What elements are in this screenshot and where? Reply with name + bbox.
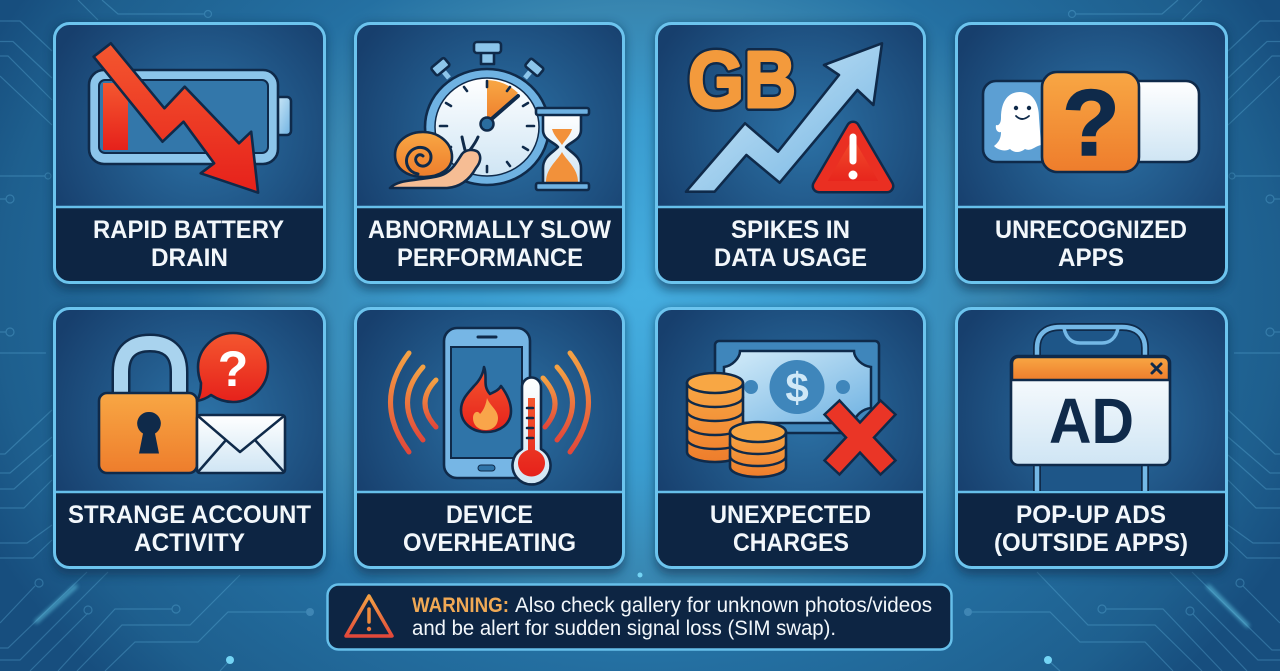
label: pop-up ads outside apps xyxy=(994,501,1188,557)
label: abnormally slow performance: ABNORMALLY SLOW xyxy=(368,216,611,244)
label: device overheating xyxy=(403,501,576,557)
icon: GB with rising arrow and alert xyxy=(686,35,887,192)
icon: GB with rising arrow and alert: GB xyxy=(688,35,796,124)
icon: padlock, question bubble and envelope: ? xyxy=(218,341,248,397)
panel: device overheating xyxy=(354,308,625,575)
label: spikes in data usage xyxy=(714,216,867,272)
panel: abnormally slow performance xyxy=(354,24,625,290)
icon: GB with rising arrow and alert: GB xyxy=(688,35,796,124)
label: unexpected charges: UNEXPECTED xyxy=(710,501,871,529)
label: unrecognized apps xyxy=(995,216,1187,272)
panel: unexpected charges xyxy=(655,308,926,575)
icon: warning triangle xyxy=(346,596,392,636)
warning text: WARNING: xyxy=(412,594,509,617)
label: strange account activity xyxy=(68,501,311,557)
label: device overheating: DEVICE xyxy=(446,501,533,529)
callout: warning xyxy=(328,584,952,650)
label: unrecognized apps: APPS xyxy=(1058,244,1124,272)
label: pop-up ads outside apps: POP-UP ADS xyxy=(1016,501,1166,529)
panel: strange account activity xyxy=(53,308,326,575)
icon: draining battery with red arrow xyxy=(89,43,291,193)
label: rapid battery drain xyxy=(93,216,284,272)
label: strange account activity: ACTIVITY xyxy=(134,529,245,557)
panel: spikes in data usage xyxy=(655,24,926,290)
panel: rapid battery drain xyxy=(53,24,326,290)
icon: banknote, coins and red cross xyxy=(687,341,881,477)
label: spikes in data usage: SPIKES IN xyxy=(731,216,850,244)
icon: stopwatch, snail and hourglass xyxy=(390,42,589,190)
icon: padlock, question bubble and envelope xyxy=(99,333,285,473)
label: unrecognized apps: UNRECOGNIZED xyxy=(995,216,1187,244)
label: unexpected charges: CHARGES xyxy=(733,529,849,557)
label: pop-up ads outside apps: (OUTSIDE APPS) xyxy=(994,529,1188,557)
icon: app tiles with question mark xyxy=(983,70,1199,175)
label: device overheating: OVERHEATING xyxy=(403,529,576,557)
warning text: and be alert for sudden signal loss (SIM swap). xyxy=(412,617,836,640)
label: abnormally slow performance: PERFORMANCE xyxy=(397,244,583,272)
label: rapid battery drain: DRAIN xyxy=(151,244,228,272)
panel: pop-up ads outside apps xyxy=(955,308,1228,575)
label: strange account activity: STRANGE ACCOUNT xyxy=(68,501,311,529)
label: abnormally slow performance xyxy=(368,216,611,272)
warning text: Also check gallery for unknown photos/videos xyxy=(515,594,932,617)
icon: app tiles with question mark: ? xyxy=(1062,70,1120,175)
icon: hot phone with thermometer and heat waves xyxy=(390,328,588,484)
label: spikes in data usage: DATA USAGE xyxy=(714,244,867,272)
label: rapid battery drain: RAPID BATTERY xyxy=(93,216,284,244)
icon: banknote, coins and red cross: $ xyxy=(785,364,809,411)
icon: phone with AD pop-up window xyxy=(1011,327,1170,491)
panel: unrecognized apps xyxy=(955,24,1228,290)
icon: phone with AD pop-up window: AD xyxy=(1049,385,1134,457)
label: unexpected charges xyxy=(710,501,871,557)
warning text xyxy=(412,594,932,640)
